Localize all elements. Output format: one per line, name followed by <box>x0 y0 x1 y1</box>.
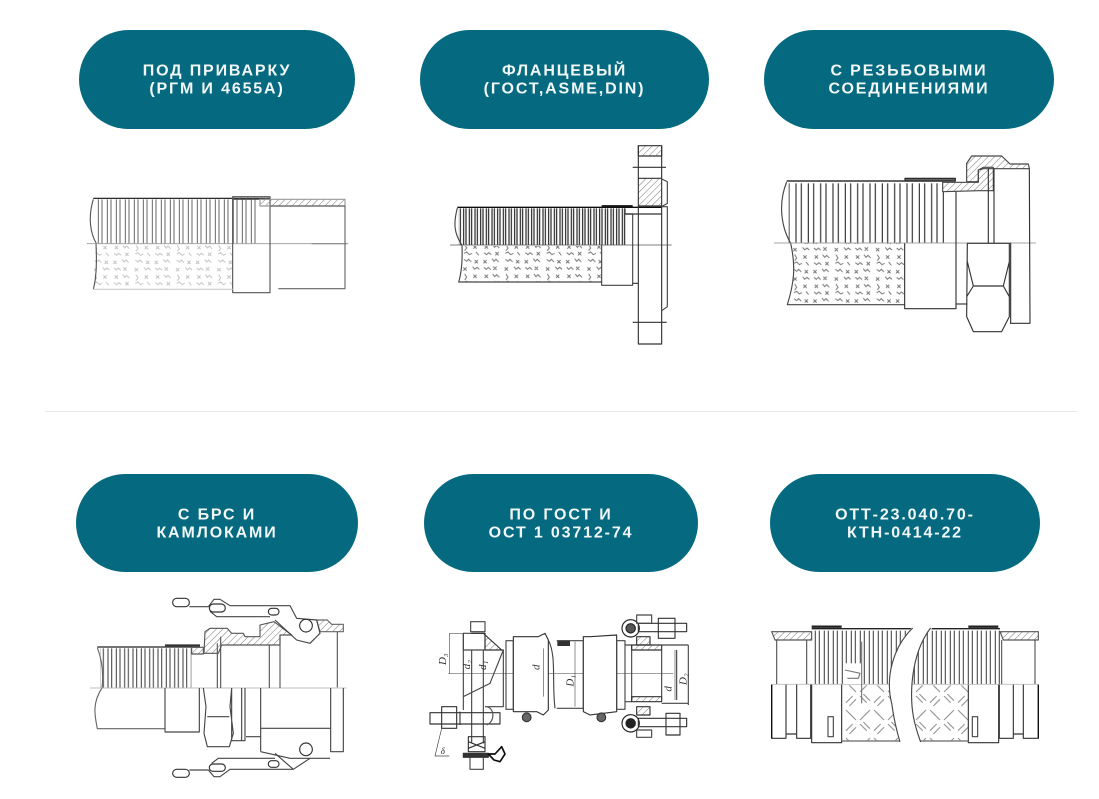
panel: GOST and OST connection <box>424 474 698 769</box>
drawing: GOST hose assembly with dimensions <box>430 615 690 769</box>
dimension labels: D₂ <box>678 673 690 686</box>
drawing: flanged hose end <box>450 146 672 344</box>
section divider <box>45 411 1077 412</box>
label pill: GOST: ПО ГОСТ И <box>509 506 613 524</box>
panel: flanged connection <box>420 30 709 344</box>
label pill: GOST: ОСТ 1 03712-74 <box>489 524 633 542</box>
dimension labels: δ <box>441 747 446 757</box>
panel: OTT specification connection <box>770 474 1040 743</box>
label pill: threaded: С РЕЗЬБОВЫМИ <box>830 62 988 80</box>
drawing: threaded hose end <box>774 156 1036 332</box>
label pill: flanged <box>420 30 709 129</box>
dimension labels: D₁ <box>564 675 576 688</box>
label pill: flanged: (ГОСТ,ASME,DIN) <box>484 80 645 98</box>
panel: weld-on connection <box>79 30 355 293</box>
label pill: OTT: КТН-0414-22 <box>847 524 963 542</box>
label pill: threaded <box>764 30 1054 129</box>
label pill: OTT: ОТТ-23.040.70- <box>835 506 975 524</box>
drawing: double-ended hose assembly <box>772 627 1038 743</box>
label pill: camlock: С БРС И <box>178 506 256 524</box>
drawing: weld-on hose end <box>87 197 348 293</box>
dimension labels: d <box>663 686 675 692</box>
label pill: camlock: КАМЛОКАМИ <box>156 524 278 542</box>
dimension labels: d₁ <box>477 661 489 670</box>
label pill: weld-on: (РГМ И 4655А) <box>149 80 285 98</box>
drawing: camlock hose end <box>90 598 347 777</box>
dimension labels: d₂ <box>461 660 473 669</box>
dimension labels <box>437 653 690 757</box>
dimension labels: D₃ <box>437 653 449 666</box>
dimension labels: d <box>530 664 542 670</box>
label pill: weld-on: ПОД ПРИВАРКУ <box>143 62 291 80</box>
panel: threaded connection <box>764 30 1054 332</box>
label pill: GOST <box>424 474 698 572</box>
panel: quick-disconnect and camlock connection <box>76 474 358 777</box>
label pill: OTT <box>770 474 1040 572</box>
label pill: camlock <box>76 474 358 572</box>
label pill: flanged: ФЛАНЦЕВЫЙ <box>502 60 627 80</box>
label pill: threaded: СОЕДИНЕНИЯМИ <box>829 80 989 98</box>
label pill: weld-on <box>79 30 355 129</box>
